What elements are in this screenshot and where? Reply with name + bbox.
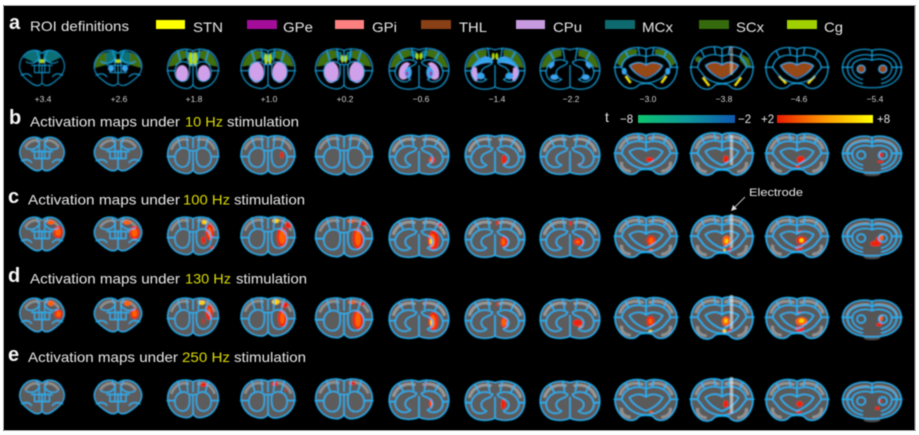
- slice coordinates: +3.4: [35, 94, 52, 104]
- map +1.8: [167, 136, 219, 174]
- legend: ROI colours: [156, 19, 843, 35]
- map -2.2: [540, 218, 600, 257]
- electrode trace, row d: [730, 295, 733, 329]
- heading: 100 Hz: Activation maps under: [28, 192, 180, 208]
- slice coordinates: −5.4: [867, 94, 884, 104]
- heading: 250 Hz: stimulation: [234, 349, 306, 365]
- map +3.4: [20, 217, 64, 251]
- slice -1.4: [465, 48, 525, 89]
- row a: ROI brain slices: [20, 47, 902, 89]
- row d: 130 Hz activation maps: [20, 295, 902, 340]
- map -0.6: [389, 218, 449, 257]
- map +1.0: [240, 217, 296, 255]
- map -2.2: [540, 381, 600, 420]
- heading: 250 Hz: [28, 349, 306, 365]
- map -1.4: [465, 381, 525, 420]
- map -3.8: [690, 379, 754, 421]
- legend: ROI colours: THL: [459, 19, 487, 35]
- slice -5.4: [842, 49, 902, 88]
- map -4.6: [765, 216, 829, 258]
- map -3.8: [690, 133, 754, 175]
- colour scale: t values: +8: [877, 114, 890, 126]
- map -3.0: [614, 297, 678, 339]
- map +1.8: [167, 380, 219, 418]
- slice coordinates: +1.0: [261, 94, 278, 104]
- slice coordinates: +0.2: [337, 94, 354, 104]
- callout: Electrode: Electrode: [749, 187, 803, 199]
- map +2.6: [94, 137, 142, 171]
- slice coordinates: +2.6: [111, 94, 128, 104]
- heading: ROI definitions: ROI definitions: [30, 18, 129, 34]
- map +1.0: [240, 136, 296, 174]
- row b: 10 Hz activation maps: [20, 133, 902, 176]
- map -3.8: [690, 297, 754, 339]
- slice coordinates: [35, 94, 884, 104]
- map -2.2: [540, 135, 600, 174]
- map +1.8: [167, 217, 219, 255]
- colour scale: t values: +2: [761, 114, 774, 126]
- map -1.4: [465, 299, 525, 338]
- map -3.0: [614, 133, 678, 175]
- map +0.2: [315, 135, 373, 175]
- heading: 10 Hz: 10 Hz: [185, 114, 223, 130]
- map -5.4: [842, 300, 902, 340]
- heading: 10 Hz: Activation maps under: [30, 114, 180, 130]
- panel label b: b: [9, 107, 21, 129]
- map -0.6: [389, 380, 449, 419]
- map +3.4: [20, 380, 64, 414]
- slice -2.2: [540, 48, 600, 89]
- map -4.6: [765, 297, 829, 339]
- slice -0.6: [389, 48, 449, 89]
- map +1.8: [167, 298, 219, 336]
- map -2.2: [540, 299, 600, 338]
- heading: 100 Hz: stimulation: [234, 192, 305, 208]
- map +0.2: [315, 298, 373, 338]
- legend: ROI colours: GPi: [372, 19, 397, 35]
- legend: ROI colours: STN: [193, 19, 223, 35]
- map -1.4: [465, 218, 525, 257]
- heading: 100 Hz: [28, 192, 305, 208]
- map +1.0: [240, 380, 296, 418]
- heading: 250 Hz: Activation maps under: [28, 349, 178, 365]
- slice coordinates: −3.8: [716, 94, 733, 104]
- colour scale: t values: t: [605, 109, 609, 125]
- legend: ROI colours: GPe: [283, 19, 313, 35]
- map -3.0: [614, 379, 678, 421]
- callout: Electrode: [731, 187, 803, 211]
- heading: 130 Hz: 130 Hz: [185, 270, 231, 286]
- slice -4.6: [765, 47, 829, 89]
- slice -3.0: [614, 47, 678, 89]
- map +2.6: [94, 298, 142, 332]
- electrode trace, row b: [730, 135, 733, 165]
- heading: 100 Hz: 100 Hz: [183, 192, 230, 208]
- map -3.8: [690, 216, 754, 258]
- legend: ROI colours: CPu: [553, 19, 582, 35]
- map -1.4: [465, 135, 525, 174]
- electrode trace, row c: [730, 214, 733, 248]
- map +2.6: [94, 217, 142, 251]
- slice -3.8: [690, 47, 754, 89]
- slice coordinates: −0.6: [413, 94, 430, 104]
- map +3.4: [20, 298, 64, 332]
- slice coordinates: −2.2: [563, 94, 580, 104]
- map -5.4: [842, 136, 902, 176]
- slice +3.4: [20, 50, 64, 86]
- map +0.2: [315, 379, 373, 419]
- slice coordinates: −3.0: [640, 94, 657, 104]
- legend: ROI colours: SCx: [736, 19, 764, 35]
- heading: 130 Hz: stimulation: [236, 270, 307, 286]
- slice coordinates: −4.6: [791, 94, 808, 104]
- electrode trace, row e: [730, 377, 733, 413]
- heading: 130 Hz: [30, 270, 307, 286]
- slice +1.8: [167, 49, 219, 89]
- heading: 250 Hz: 250 Hz: [182, 349, 230, 365]
- electrode trace, row a: [730, 47, 733, 75]
- heading: 10 Hz: stimulation: [227, 114, 299, 130]
- map -3.0: [614, 216, 678, 258]
- panel label d: d: [8, 265, 20, 287]
- colour scale: t values: −2: [738, 114, 751, 126]
- map +2.6: [94, 380, 142, 414]
- slice coordinates: −1.4: [489, 94, 506, 104]
- map +1.0: [240, 298, 296, 336]
- map -4.6: [765, 379, 829, 421]
- slice +1.0: [240, 49, 296, 89]
- slice +0.2: [315, 49, 373, 89]
- panel label e: e: [8, 344, 19, 366]
- heading: 130 Hz: Activation maps under: [30, 270, 180, 286]
- row c: 100 Hz activation maps: [20, 214, 902, 259]
- heading: 10 Hz: [30, 114, 299, 130]
- legend: ROI colours: MCx: [642, 19, 673, 35]
- row e: 250 Hz activation maps: [20, 377, 902, 422]
- panel label c: c: [8, 186, 19, 208]
- panel label a: a: [9, 12, 21, 34]
- map -5.4: [842, 382, 902, 422]
- map -5.4: [842, 219, 902, 259]
- map -0.6: [389, 299, 449, 338]
- map -0.6: [389, 135, 449, 174]
- slice coordinates: +1.8: [186, 94, 203, 104]
- colour scale: t values: [605, 109, 890, 126]
- map -4.6: [765, 133, 829, 175]
- legend: ROI colours: Cg: [824, 19, 843, 35]
- slice +2.6: [94, 50, 142, 86]
- colour scale: t values: −8: [620, 114, 633, 126]
- map +3.4: [20, 137, 64, 171]
- map +0.2: [315, 217, 373, 257]
